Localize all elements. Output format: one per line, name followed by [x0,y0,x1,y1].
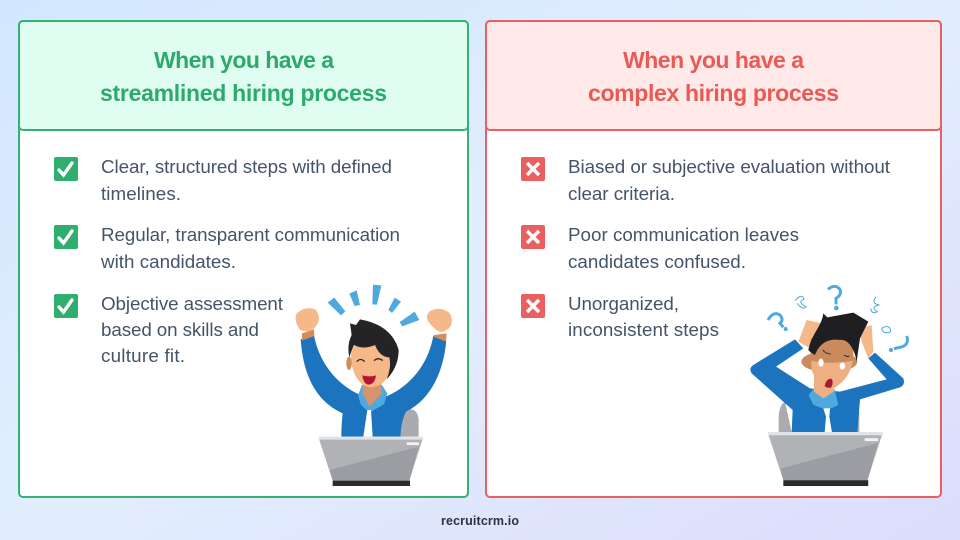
illustration: happy person at laptop [296,285,452,437]
text: assessment [101,293,284,366]
text: assessment: based on skills and [101,319,259,340]
panel header: complex [486,21,941,130]
text: unorganized: Unorganized, [568,293,679,314]
heading: streamlined [100,47,387,106]
text: clear steps: timelines. [101,183,181,204]
text: poor communication: Poor communication leaves [568,224,799,245]
icon: cross 2 [521,225,545,249]
heading: streamlined: streamlined hiring process [100,80,387,106]
panel: complex hiring process [486,21,941,497]
text: assessment: culture fit. [101,345,185,366]
heading: complex: complex hiring process [588,80,839,106]
text: communication: with candidates. [100,251,236,272]
text: communication [100,224,400,272]
footer brand: recruitcrm.io [441,514,519,528]
illustration laptop: stressed [768,432,883,486]
text: unorganized: inconsistent steps [568,319,719,340]
panel: streamlined hiring process [19,21,468,497]
icon: cross 3 [521,294,545,318]
text: communication: Regular, transparent communication [101,224,400,245]
text: clear steps: Clear, structured steps with defined [101,156,392,177]
text: biased: Biased or subjective evaluation without [568,156,891,177]
icon: check 2 [54,225,78,249]
icon: check 1 [54,157,78,181]
heading: complex [588,47,839,106]
illustration: stressed person at laptop [750,286,907,432]
text: biased [568,156,891,204]
heading: complex: When you have a [623,47,804,73]
text: biased: clear criteria. [568,183,675,204]
text: clear steps [101,156,392,204]
illustration laptop: happy [319,437,423,486]
icon: check 3 [54,294,78,318]
panel header: streamlined [19,21,468,130]
text: poor communication: candidates confused. [568,251,746,272]
text: poor communication [568,224,799,272]
icon: cross 1 [521,157,545,181]
heading: streamlined: When you have a [154,47,334,73]
text: assessment: Objective assessment [101,293,284,314]
text: unorganized [568,293,719,340]
